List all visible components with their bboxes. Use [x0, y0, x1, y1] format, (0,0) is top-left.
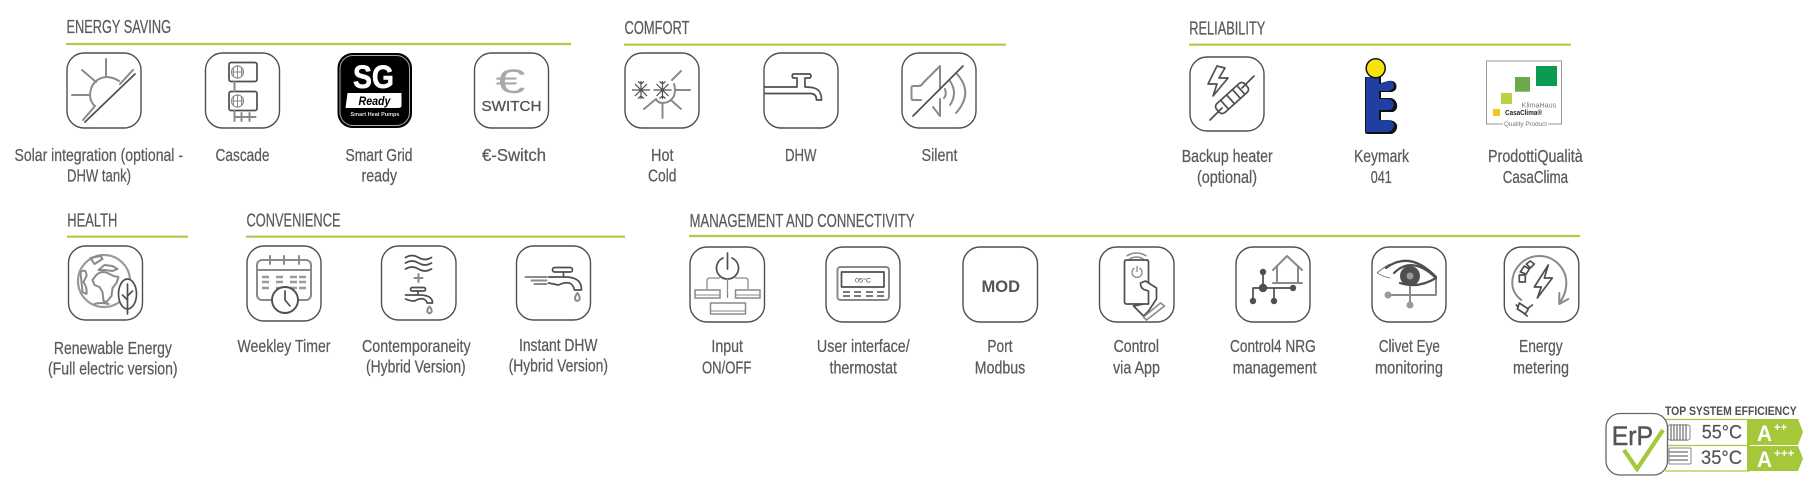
icon: heat waves plus tap	[382, 246, 456, 320]
label: keymark	[1354, 146, 1409, 187]
label: user interface	[817, 336, 910, 378]
feature: keymark	[1354, 59, 1409, 187]
icon: calendar clock	[247, 246, 321, 321]
label: renewable energy	[48, 338, 178, 379]
icon: radiator	[1668, 424, 1690, 441]
label: port modbus	[975, 336, 1025, 378]
label: smart grid ready	[346, 145, 412, 186]
feature: backup heater	[1182, 57, 1273, 187]
label: keymark: Keymark	[1354, 146, 1409, 166]
label: backup heater	[1182, 146, 1273, 187]
label: contemporaneity	[362, 336, 471, 377]
label: keymark: 041	[1371, 167, 1392, 187]
panel: health	[48, 211, 188, 379]
feature: DHW	[764, 53, 838, 165]
label: control4 NRG: management	[1233, 358, 1317, 378]
icon: network and house	[1236, 247, 1310, 322]
green class arrow: A+++: A	[1757, 447, 1772, 472]
label: user interface: thermostat	[830, 358, 897, 378]
green class arrow: A++	[1747, 419, 1803, 446]
feature: hot cold	[625, 53, 699, 186]
label: hot cold	[648, 145, 676, 186]
icon: underfloor heating	[1669, 448, 1691, 464]
label: port modbus: Modbus	[975, 358, 1025, 378]
label: silent: Silent	[922, 145, 958, 165]
feature: instant DHW	[509, 246, 608, 376]
label: contemporaneity: (Hybrid Version)	[366, 357, 466, 377]
icon: CasaClima quality logo	[1486, 61, 1562, 128]
label: port modbus: Port	[987, 336, 1013, 356]
label: solar integration: DHW tank)	[67, 166, 131, 186]
icon: SG ready badge: Ready	[358, 96, 391, 108]
heading: reliability: RELIABILITY	[1189, 18, 1265, 38]
temperature: 55°C: 55°C	[1702, 422, 1742, 443]
label: contemporaneity: Contemporaneity	[362, 336, 471, 356]
icon: thermostat: 05°C	[855, 276, 871, 284]
label: control via app: via App	[1113, 358, 1160, 378]
feature: weekly timer	[238, 246, 331, 356]
icon: SG ready badge: SG	[353, 59, 394, 95]
icon: SG ready badge: Smart Heat Pumps	[350, 112, 400, 118]
label: control via app: Control	[1114, 336, 1159, 356]
icon: solar	[67, 53, 141, 128]
green class arrow: A+++	[1747, 446, 1803, 472]
label: input on/off	[702, 336, 751, 378]
feature: user interface	[817, 247, 910, 378]
label: CasaClima: CasaClima	[1503, 167, 1568, 187]
panel: management and connectivity	[689, 211, 1580, 378]
label: input on/off: Input	[711, 336, 743, 356]
icon: resistor and bolt	[1190, 57, 1264, 131]
icon: cascade	[206, 53, 280, 128]
label: input on/off: ON/OFF	[702, 358, 751, 378]
label: energy metering: Energy	[1519, 336, 1563, 356]
green class arrow: A++: ++	[1774, 422, 1787, 434]
ErP box: ErP	[1612, 421, 1653, 451]
label: DHW: DHW	[785, 145, 817, 165]
feature: CasaClima	[1486, 61, 1583, 187]
label: clivet eye: Clivet Eye	[1379, 336, 1440, 356]
icon: e-switch: SWITCH	[482, 98, 542, 115]
icon: hot and cold	[625, 53, 699, 128]
icon: keymark logo	[1365, 59, 1397, 134]
feature: control via app	[1100, 247, 1174, 378]
label: e-switch: €-Switch	[482, 145, 546, 165]
icon: e-switch	[474, 53, 548, 128]
label: hot cold: Cold	[648, 166, 676, 186]
icon: tap	[764, 53, 838, 128]
label: cascade: Cascade	[216, 145, 270, 165]
feature: contemporaneity	[362, 246, 471, 377]
label: energy metering	[1513, 336, 1569, 378]
label: hot cold: Hot	[651, 145, 674, 165]
label: control via app	[1113, 336, 1160, 378]
label: clivet eye: monitoring	[1375, 358, 1443, 378]
feature: port modbus	[963, 247, 1038, 378]
feature: input on/off	[690, 247, 764, 378]
label: backup heater: Backup heater	[1182, 146, 1273, 166]
feature: renewable energy	[48, 246, 178, 379]
heading: comfort: COMFORT	[624, 18, 690, 38]
feature: control4 NRG	[1230, 247, 1317, 378]
label: instant DHW: (Hybrid Version)	[509, 356, 608, 376]
heading: energy saving: ENERGY SAVING	[66, 17, 171, 37]
label: smart grid ready: ready	[362, 166, 397, 186]
icon: CasaClima quality logo: CasaClima®	[1505, 109, 1543, 117]
icon: MOD: MOD	[982, 277, 1020, 296]
badge: ErP top system efficiency	[1606, 406, 1803, 475]
label: CasaClima	[1488, 146, 1583, 187]
green class arrow: A++: A	[1757, 421, 1772, 446]
heading: convenience: CONVENIENCE	[246, 211, 340, 231]
label: smart grid ready: Smart Grid	[346, 145, 412, 165]
green class arrow: A+++: +++	[1774, 448, 1794, 460]
icon: SG ready badge	[338, 53, 412, 128]
label: solar integration	[14, 145, 183, 186]
icon: CasaClima quality logo: Quality Product	[1504, 121, 1547, 128]
feature: solar integration	[14, 53, 183, 186]
label: weekly timer: Weekley Timer	[238, 336, 331, 356]
feature: clivet eye	[1372, 247, 1446, 378]
icon: meter with plug and bolt	[1504, 247, 1579, 322]
label: instant DHW: Instant DHW	[519, 335, 598, 355]
icon: phone in hand	[1100, 247, 1174, 322]
feature: smart grid ready	[338, 53, 412, 186]
feature: silent	[902, 53, 976, 165]
icon: globe with tree	[68, 246, 142, 320]
panel: reliability	[1182, 18, 1583, 187]
ErP box	[1606, 414, 1668, 475]
label: CasaClima: ProdottiQualità	[1488, 146, 1583, 166]
label: clivet eye	[1375, 336, 1443, 378]
heading: management and connectivity: MANAGEMENT AND CONNECTIVITY	[690, 211, 915, 231]
temperature: 35°C: 35°C	[1701, 448, 1742, 469]
icon: eye with circuit	[1372, 247, 1446, 322]
feature: cascade	[206, 53, 280, 165]
label: renewable energy: (Full electric version)	[48, 359, 178, 379]
label: renewable energy: Renewable Energy	[54, 338, 172, 358]
label: solar integration: Solar integration (optional -	[14, 145, 183, 165]
icon: muted speaker	[902, 53, 976, 128]
label: backup heater: (optional)	[1197, 167, 1257, 187]
feature: e-switch	[474, 53, 548, 165]
panel: energy saving	[14, 17, 571, 186]
icon: e-switch: €	[496, 63, 526, 101]
label: instant DHW	[509, 335, 608, 376]
heading: health: HEALTH	[67, 211, 117, 231]
feature: energy metering	[1504, 247, 1579, 378]
label: energy metering: metering	[1513, 358, 1569, 378]
icon: CasaClima quality logo: KlimaHaus	[1522, 102, 1557, 110]
efficiency title: TOP SYSTEM EFFICIENCY	[1665, 406, 1797, 418]
icon: instant tap	[516, 246, 590, 320]
panel: comfort	[624, 18, 1006, 186]
label: control4 NRG: Control4 NRG	[1230, 336, 1316, 356]
panel: convenience	[238, 211, 625, 377]
label: user interface: User interface/	[817, 336, 910, 356]
label: control4 NRG	[1230, 336, 1317, 378]
icon: power and units	[690, 247, 764, 322]
